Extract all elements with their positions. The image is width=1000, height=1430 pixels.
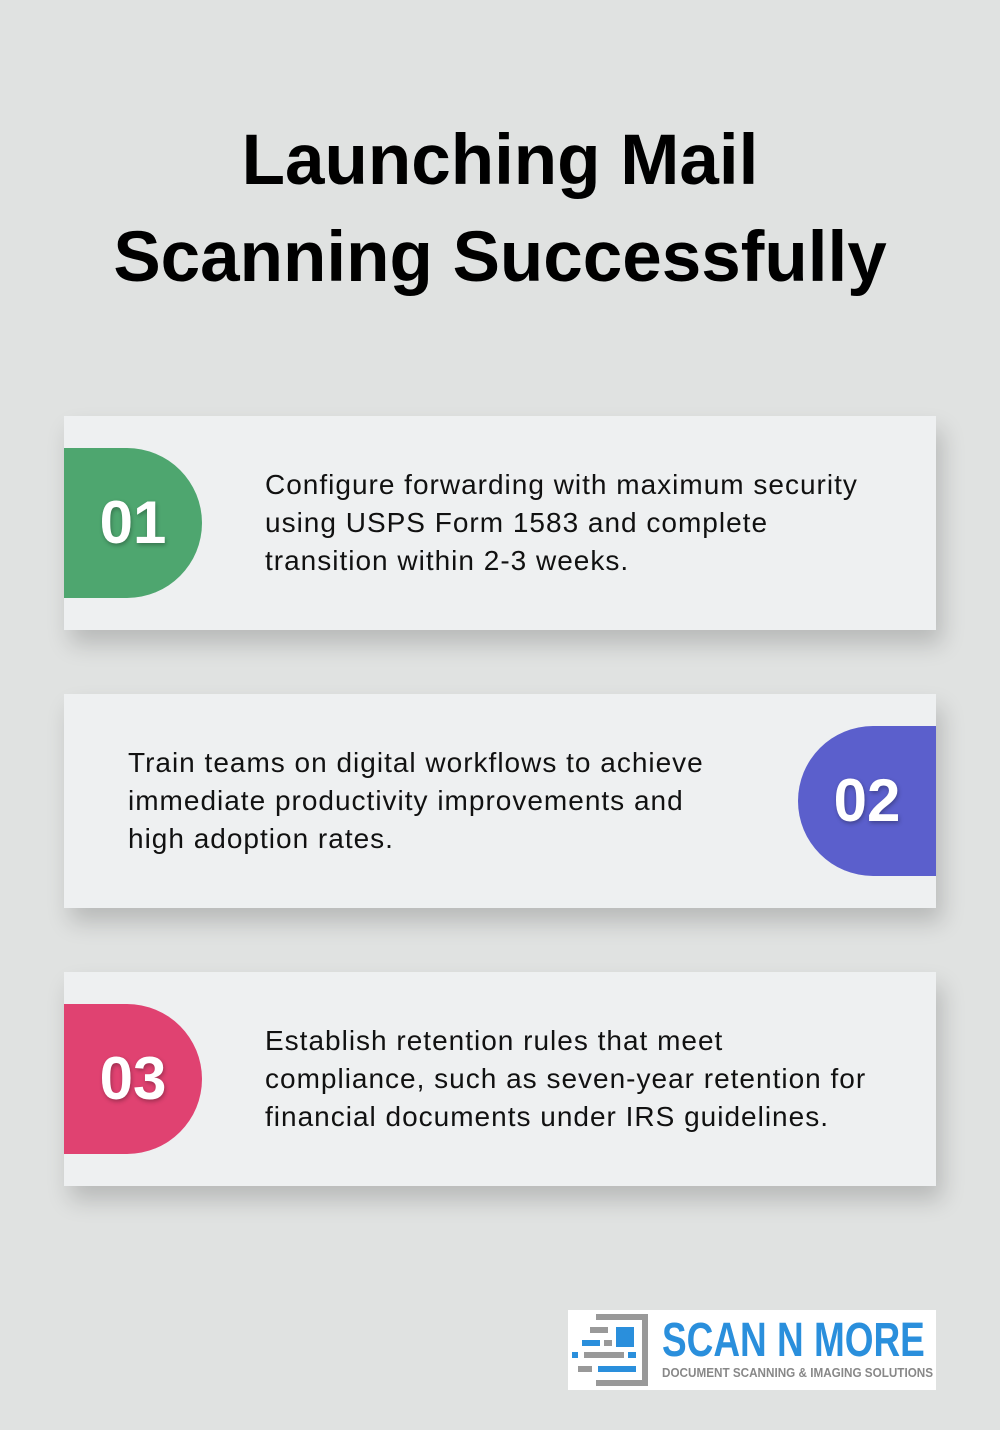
text 01: transition within 2-3 weeks. xyxy=(265,545,629,576)
title xyxy=(113,121,887,297)
text 01: using USPS Form 1583 and complete xyxy=(265,507,768,538)
card: step 01 xyxy=(64,416,936,630)
badge 02: 02 xyxy=(834,767,900,834)
badge 01 xyxy=(64,448,202,598)
card: step 03 xyxy=(64,972,936,1186)
text 03: compliance, such as seven-year retention for xyxy=(265,1063,866,1094)
text 01: Configure forwarding with maximum security xyxy=(265,469,858,500)
badge 01: 01 xyxy=(100,489,166,556)
card: step 02 xyxy=(64,694,936,908)
text 03 xyxy=(265,1025,866,1132)
text 03: financial documents under IRS guidelines. xyxy=(265,1101,829,1132)
logo name: SCAN N MORE xyxy=(662,1314,925,1367)
icon: logo mark xyxy=(572,1314,648,1386)
badge 02 xyxy=(798,726,936,876)
text 03: Establish retention rules that meet xyxy=(265,1025,723,1056)
title: Scanning Successfully xyxy=(113,218,887,297)
title: Launching Mail xyxy=(242,121,758,200)
text 02: Train teams on digital workflows to achieve xyxy=(128,747,704,778)
text 01 xyxy=(265,469,858,576)
text 02: immediate productivity improvements and xyxy=(128,785,684,816)
badge 03: 03 xyxy=(100,1045,166,1112)
logo xyxy=(568,1310,936,1390)
text 02: high adoption rates. xyxy=(128,823,394,854)
badge 03 xyxy=(64,1004,202,1154)
text 02 xyxy=(128,747,704,854)
logo tagline: DOCUMENT SCANNING & IMAGING SOLUTIONS xyxy=(662,1365,933,1380)
